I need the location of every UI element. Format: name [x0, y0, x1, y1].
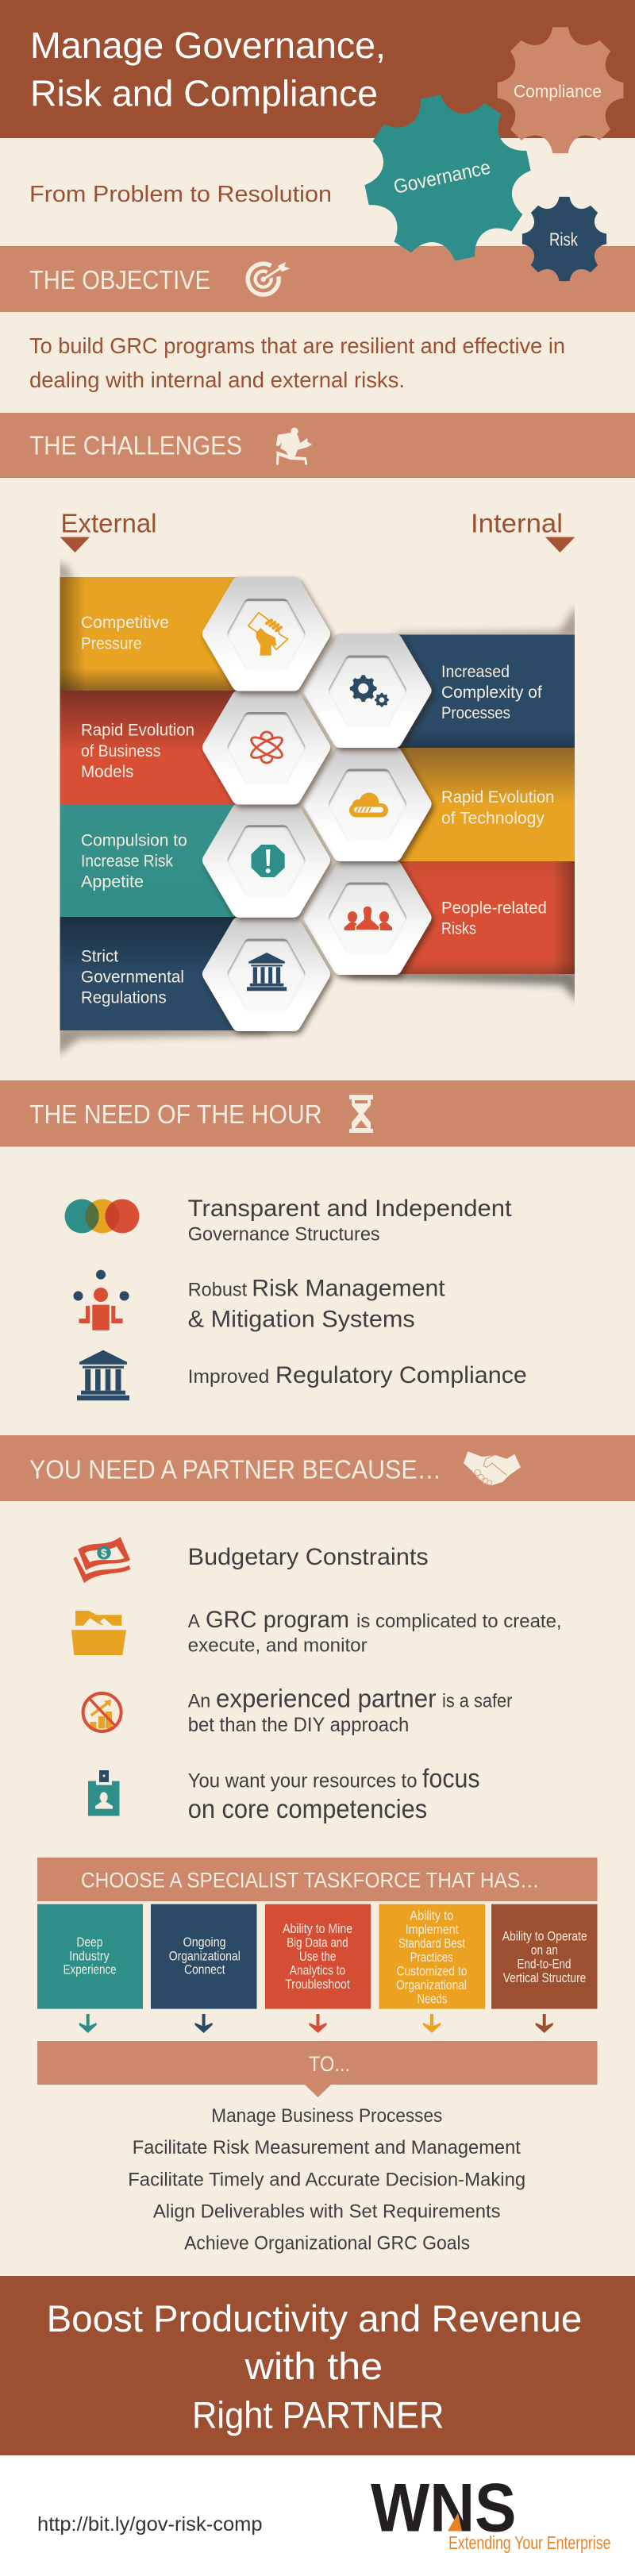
column: deep industry experience: Deep	[76, 1935, 102, 1950]
need item: governance	[65, 1196, 512, 1245]
column: big data: Big Data and	[287, 1935, 348, 1950]
column: end-to-end: Ability to Operate	[502, 1929, 587, 1943]
text: complexity: Complexity of	[441, 683, 542, 702]
panel: challenges diagram	[56, 508, 579, 1056]
column: ongoing organizational connect: Ongoing	[183, 1935, 226, 1950]
text	[188, 1275, 445, 1333]
heading: you need a partner: YOU NEED A PARTNER BECAUSE…	[29, 1454, 441, 1484]
text: complexity: Processes	[441, 704, 510, 722]
panel: objective band	[0, 246, 635, 312]
partner item: complicated program	[71, 1607, 562, 1656]
column: end-to-end: End-to-End	[518, 1957, 572, 1971]
list of goals: Achieve Organizational GRC Goals	[184, 2233, 470, 2254]
arrows	[79, 2014, 553, 2033]
heading: the challenges: THE CHALLENGES	[29, 430, 242, 460]
hexagon: risk appetite alert	[210, 811, 322, 910]
text: You want your resources to	[188, 1769, 417, 1792]
left bars	[60, 577, 267, 1030]
hexagon: business models atom	[210, 699, 322, 797]
text	[188, 1685, 512, 1736]
icon: money: $	[101, 1546, 107, 1559]
panel: specialist taskforce	[37, 1858, 597, 2254]
column: best practices: Needs	[418, 1993, 448, 2007]
icon: hourglass	[349, 1095, 373, 1133]
text: risk appetite: Compulsion to	[81, 831, 187, 849]
icon: bank	[77, 1350, 129, 1400]
text: risk appetite: Increase Risk	[81, 853, 173, 870]
column: deep industry experience: Experience	[64, 1962, 117, 1977]
hexagon: process complexity gears	[311, 641, 424, 740]
column: best practices: Standard Best	[398, 1937, 465, 1951]
column: big data: Troubleshoot	[285, 1977, 350, 1992]
panel: challenges band	[0, 413, 635, 478]
gear: risk: Risk	[549, 229, 578, 250]
banner: to: TO...	[309, 2052, 350, 2076]
text: business models: Models	[81, 763, 133, 781]
column: best practices: Organizational	[396, 1978, 467, 1993]
icon: no DIY	[83, 1693, 121, 1731]
text: complexity: Increased	[441, 663, 510, 681]
right bars	[368, 635, 575, 974]
title: Manage Governance,	[30, 25, 386, 66]
column: big data: Analytics to	[290, 1964, 345, 1978]
text	[188, 1607, 562, 1656]
icon: overlapping circles	[65, 1199, 140, 1234]
subtitle: From Problem to Resolution	[29, 182, 332, 207]
text: focus	[422, 1763, 480, 1792]
column: best practices: Customized to	[397, 1965, 467, 1979]
icon: handshake	[464, 1451, 521, 1485]
hexagon: competitive pressure	[210, 584, 322, 683]
list of goals	[128, 2105, 525, 2254]
panel: closing banner: Boost Productivity and Revenue	[47, 2297, 582, 2339]
column: deep industry experience: Industry	[69, 1949, 110, 1963]
text: execute, and monitor	[188, 1635, 368, 1656]
partner item: budget	[73, 1537, 429, 1583]
text: competitive pressure: Pressure	[81, 634, 141, 653]
label: external	[60, 508, 157, 553]
banner: to	[37, 2041, 597, 2097]
gear: governance	[349, 79, 546, 276]
list of goals: Facilitate Risk Measurement and Management	[133, 2137, 521, 2158]
column: end-to-end: Vertical Structure	[503, 1971, 586, 1985]
text: competitive pressure	[81, 614, 169, 653]
text: business models	[81, 722, 194, 781]
title	[30, 25, 386, 114]
panel: closing banner: Right PARTNER	[192, 2394, 444, 2436]
icon: folder	[71, 1611, 126, 1655]
text: technology: of Technology	[441, 809, 545, 827]
text: Robust	[188, 1279, 248, 1300]
icon: hurdler	[276, 428, 312, 465]
text: bet than the DIY approach	[188, 1714, 409, 1736]
column: big data	[265, 1904, 371, 2009]
column: best practices: Implement	[406, 1923, 459, 1937]
list of goals: Facilitate Timely and Accurate Decision-Making	[128, 2169, 525, 2190]
column: deep industry experience	[37, 1904, 143, 2009]
gear: governance: Governance	[391, 156, 493, 198]
gear: compliance	[498, 27, 623, 153]
column: big data: Use the	[299, 1950, 336, 1964]
need item: risk management	[73, 1270, 445, 1333]
text: regulations: Regulations	[81, 989, 167, 1007]
icon: money	[73, 1537, 130, 1583]
text: business models: Rapid Evolution	[81, 722, 194, 740]
text: An	[188, 1691, 210, 1712]
text: risk appetite: Appetite	[81, 873, 144, 891]
heading: the objective: THE OBJECTIVE	[29, 265, 210, 295]
panel: closing banner	[0, 2276, 635, 2455]
hexagon: technology cloud	[311, 755, 424, 853]
need item: compliance	[77, 1350, 527, 1400]
column: end-to-end	[491, 1904, 597, 2009]
logo: WNS: WNS	[371, 2470, 516, 2547]
text: experienced partner	[216, 1685, 437, 1713]
column: ongoing organizational connect: Connect	[184, 1962, 225, 1977]
column: big data: Ability to Mine	[283, 1922, 352, 1936]
hexagon: people	[311, 868, 424, 967]
gear: compliance: Compliance	[514, 82, 602, 102]
text: Transparent and Independent	[188, 1196, 512, 1222]
text: is complicated to create,	[356, 1611, 562, 1632]
text: people risks: People-related	[441, 899, 547, 917]
column: best practices: Practices	[410, 1950, 453, 1965]
column: end-to-end: on an	[531, 1943, 558, 1958]
column: ongoing organizational connect: Organizational	[169, 1949, 241, 1963]
column: ongoing organizational connect	[151, 1904, 257, 2009]
list of goals: Align Deliverables with Set Requirements	[153, 2201, 501, 2222]
text: people risks: Risks	[441, 919, 476, 938]
objective text: dealing with internal and external risks.	[29, 368, 405, 392]
text: regulations: Governmental	[81, 968, 184, 987]
text: Improved	[188, 1366, 269, 1388]
text	[188, 1763, 480, 1823]
icon: juggling person	[73, 1270, 129, 1330]
column: best practices	[379, 1904, 485, 2009]
text: competitive pressure: Competitive	[81, 614, 169, 632]
text: & Mitigation Systems	[188, 1307, 415, 1333]
panel: footer	[0, 2455, 635, 2576]
heading: choose a specialist taskforce	[37, 1858, 597, 1901]
text: technology: Rapid Evolution	[441, 788, 554, 807]
text: people risks	[441, 899, 547, 938]
gear: risk	[522, 197, 606, 281]
label: internal: Internal	[471, 508, 563, 538]
text: Budgetary Constraints	[188, 1544, 429, 1570]
text: GRC program	[206, 1607, 349, 1633]
list of goals: Manage Business Processes	[211, 2105, 442, 2127]
logo: WNS	[371, 2470, 610, 2553]
title: Risk and Compliance	[30, 73, 378, 114]
text: regulations: Strict	[81, 947, 118, 965]
text: business models: of Business	[81, 742, 160, 760]
text: Governance Structures	[188, 1223, 380, 1245]
label: external: External	[60, 508, 157, 538]
label: internal	[471, 508, 575, 553]
objective text: To build GRC programs that are resilient and effective in	[29, 333, 565, 358]
panel: need of the hour band	[0, 1080, 635, 1146]
hexagon: government regulations	[210, 925, 322, 1023]
text: A	[188, 1611, 200, 1632]
url: http://bit.ly/gov-risk-comp	[37, 2513, 263, 2536]
heading: choose a specialist taskforce: CHOOSE A SPECIALIST TASKFORCE THAT HAS…	[81, 1869, 540, 1893]
text: Risk Management	[252, 1275, 445, 1301]
text: technology	[441, 788, 554, 827]
text: complexity	[441, 663, 542, 722]
icon: target	[248, 262, 291, 295]
heading: need of the hour: THE NEED OF THE HOUR	[29, 1099, 322, 1129]
text	[188, 1196, 512, 1245]
text: risk appetite	[81, 831, 187, 891]
text: regulations	[81, 947, 184, 1007]
partner item: experienced partner	[83, 1685, 512, 1736]
panel: partner band	[0, 1435, 635, 1501]
panel: closing banner: with the	[244, 2345, 383, 2387]
objective text	[29, 333, 565, 392]
column: best practices: Ability to	[410, 1909, 453, 1923]
panel: header	[0, 0, 635, 207]
text: is a safer	[442, 1691, 512, 1712]
partner item: focus	[88, 1763, 480, 1823]
text: on core competencies	[188, 1794, 427, 1823]
text: Regulatory Compliance	[275, 1362, 527, 1388]
icon: id badge	[88, 1770, 119, 1816]
